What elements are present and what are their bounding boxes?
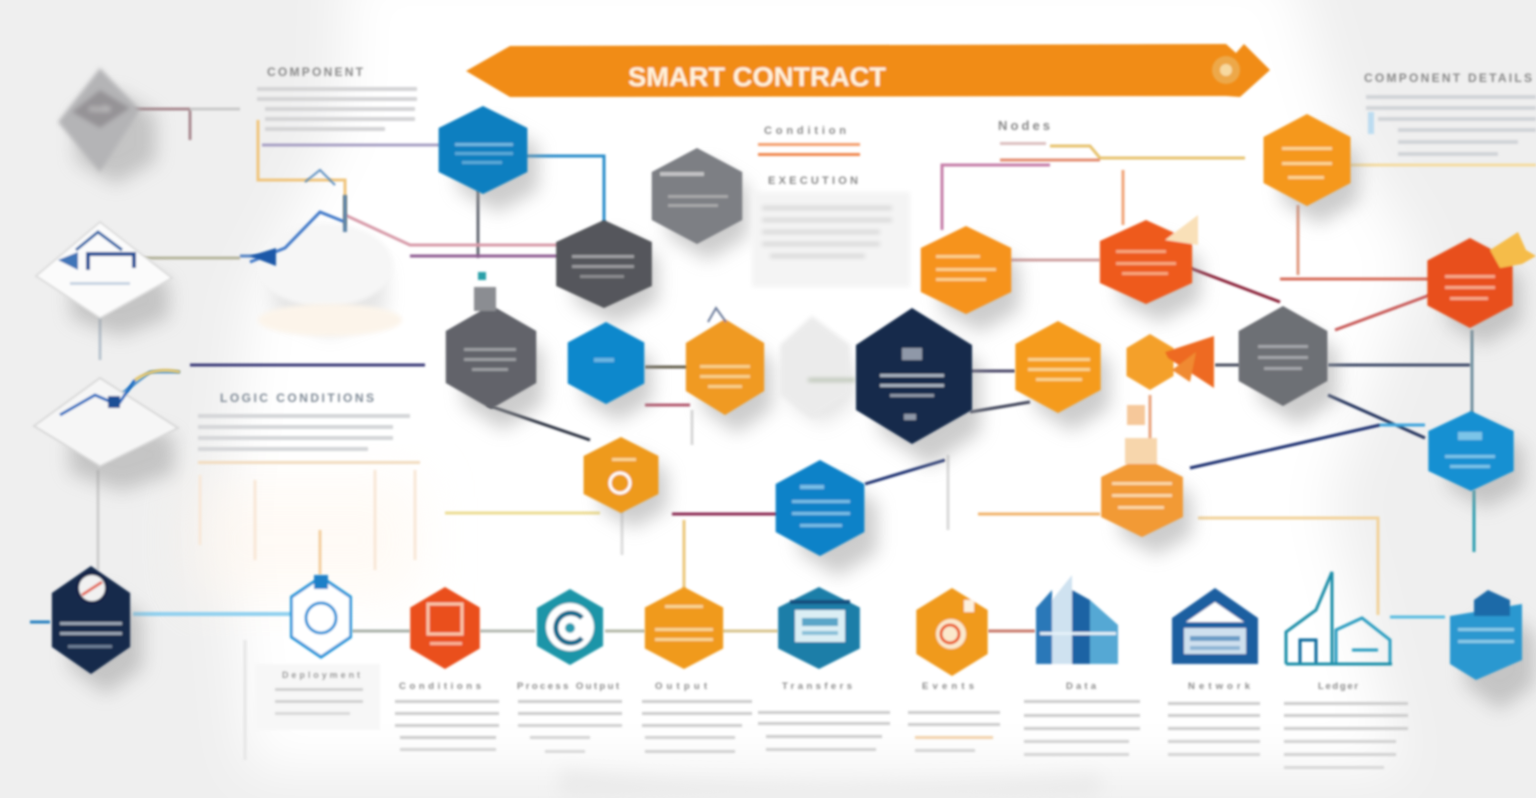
caption 5 — [758, 681, 890, 751]
text block: center heading with stripes: EXECUTION — [768, 175, 858, 187]
bottom icon: outline hexagon — [291, 575, 351, 657]
caption 2 — [395, 681, 499, 751]
text block: top right: COMPONENT DETAILS — [1364, 71, 1532, 85]
caption 8 — [1168, 681, 1260, 756]
caption 9 — [1284, 681, 1408, 769]
caption 2: Conditions — [399, 681, 481, 692]
hexagon: blue lower center — [776, 460, 864, 556]
bottom icon: teal hexagon — [537, 589, 603, 665]
pale chart lines under left text — [200, 470, 415, 760]
text block: middle left: LOGIC CONDITIONS — [220, 391, 374, 405]
bottom captions — [255, 664, 1408, 769]
small orange hexagon with arrow — [1127, 334, 1214, 425]
pale hexagon — [780, 316, 855, 418]
hexagon: gray right — [1239, 306, 1327, 406]
bottom icon: orange hexagon — [645, 587, 723, 669]
hexagon: orange lower right — [1101, 438, 1183, 537]
bottom icon: house — [1172, 588, 1258, 664]
caption 3: Process Output — [517, 681, 620, 692]
network icon with bowl — [250, 170, 402, 336]
text block: small upper label: Nodes — [998, 118, 1050, 133]
connector lines — [30, 109, 1536, 631]
caption 8: Network — [1188, 681, 1251, 692]
text block: small upper label — [998, 118, 1050, 145]
hexagon: red-orange upper — [1100, 215, 1198, 304]
bottom icon: blue isometric block — [1450, 590, 1522, 680]
text block: top left — [257, 65, 417, 131]
text block: top left: COMPONENT — [267, 65, 364, 79]
left diamond: gray cube: node — [89, 104, 112, 115]
banner icon — [1212, 56, 1240, 84]
hexagon: blue right — [1428, 411, 1514, 491]
caption 7: Data — [1066, 681, 1097, 692]
hexagon: blue top — [439, 106, 527, 194]
caption 6: Events — [922, 681, 974, 692]
hexagon: orange upper — [921, 226, 1011, 314]
hexagon shadows — [69, 92, 1535, 710]
text block: top right — [1364, 71, 1536, 156]
text block: center description — [752, 192, 910, 287]
left diamond: gray cube — [58, 68, 140, 172]
hexagon: orange center — [686, 308, 764, 415]
hexagon: orange right of navy — [1015, 321, 1101, 413]
caption 7 — [1024, 681, 1140, 756]
title arrow banner — [466, 44, 1270, 97]
caption 1: Deployment — [282, 670, 360, 680]
bottom icon: teal blue hexagon — [778, 587, 860, 669]
caption 9: Ledger — [1318, 681, 1358, 692]
caption 1 — [255, 664, 380, 730]
text block: center heading with stripes — [758, 125, 860, 187]
left diamond: white with arrows — [36, 222, 172, 318]
hexagon: blue center — [568, 322, 644, 404]
hexagon: slate gray left — [446, 272, 536, 409]
bottom icon: buildings — [1036, 575, 1118, 664]
bottom icon: orange document — [916, 588, 988, 676]
hexagon: red-orange right — [1427, 232, 1536, 328]
hexagon: dark gray — [556, 220, 652, 308]
caption 5: Transfers — [782, 681, 852, 692]
left diamond: chart — [34, 370, 180, 466]
caption 3 — [517, 681, 622, 753]
hexagon: orange lower center — [584, 437, 658, 513]
hexagon: orange top right — [1264, 114, 1350, 206]
text block: center heading with stripes: Condition — [764, 125, 846, 137]
caption 6 — [908, 681, 1000, 752]
hexagon: navy central — [856, 308, 972, 444]
hexagon: gray top — [652, 148, 742, 244]
bottom icon: outline buildings — [1286, 572, 1392, 664]
caption 4: Output — [655, 681, 708, 692]
bottom icon: red hexagon — [410, 587, 480, 669]
title: SMART CONTRACT — [628, 62, 886, 92]
text block: middle left — [198, 391, 420, 464]
bottom icon: navy hexagon — [52, 566, 130, 674]
caption 4 — [642, 681, 752, 753]
